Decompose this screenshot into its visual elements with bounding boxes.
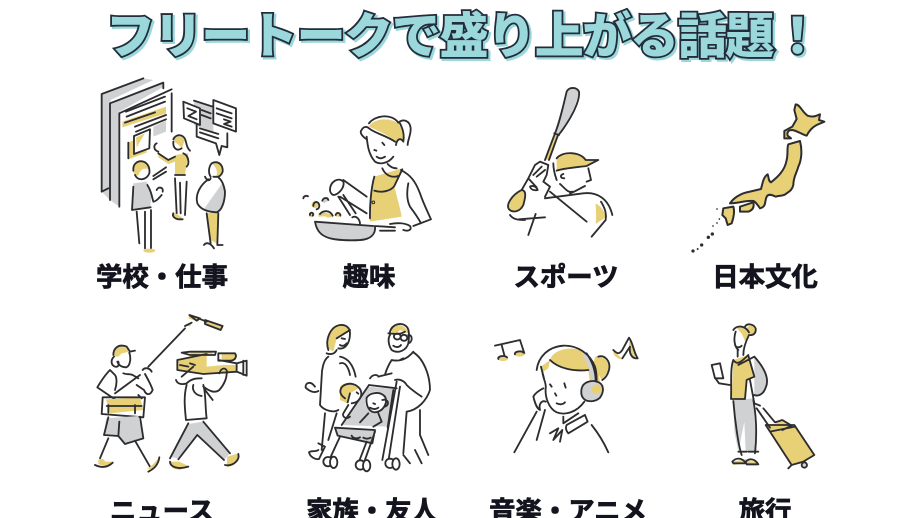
panel: school and work <box>102 78 236 253</box>
icon: documents and three people <box>102 78 236 253</box>
Kyushu <box>722 207 734 225</box>
title: フリートークで盛り上がる話題！ <box>108 11 824 66</box>
Shikoku <box>740 202 754 212</box>
speech bubbles <box>194 102 213 132</box>
panel: travel <box>712 324 814 468</box>
cameraman <box>177 352 237 373</box>
panel: Japanese culture <box>691 104 824 253</box>
panel: music and anime <box>495 338 638 452</box>
panel: family and friends <box>306 324 430 471</box>
Hokkaido <box>784 104 824 138</box>
icon: baseball batter <box>508 88 612 237</box>
icon: news crew with camera and boom microphone <box>95 315 247 472</box>
left person <box>133 182 152 210</box>
icon: person cooking <box>303 116 431 240</box>
panel: sports <box>508 88 612 237</box>
label: school and work: 学校・仕事 <box>96 262 228 292</box>
panel: news <box>95 315 247 472</box>
icon: traveller with suitcase <box>712 324 814 468</box>
right person <box>203 182 225 212</box>
label: hobbies: 趣味 <box>343 262 395 292</box>
panel: hobbies <box>303 116 431 240</box>
icon: map of Japan <box>691 104 824 253</box>
title: フリートークで盛り上がる話題！ <box>106 9 822 64</box>
centre person <box>175 153 188 175</box>
label: Japanese culture: 日本文化 <box>712 262 818 292</box>
label: sports: スポーツ <box>513 262 619 292</box>
icon: person listening with headphones <box>495 338 638 452</box>
Honshu <box>730 141 801 208</box>
Okinawa islands <box>691 208 720 253</box>
icon: family with stroller <box>306 324 430 471</box>
